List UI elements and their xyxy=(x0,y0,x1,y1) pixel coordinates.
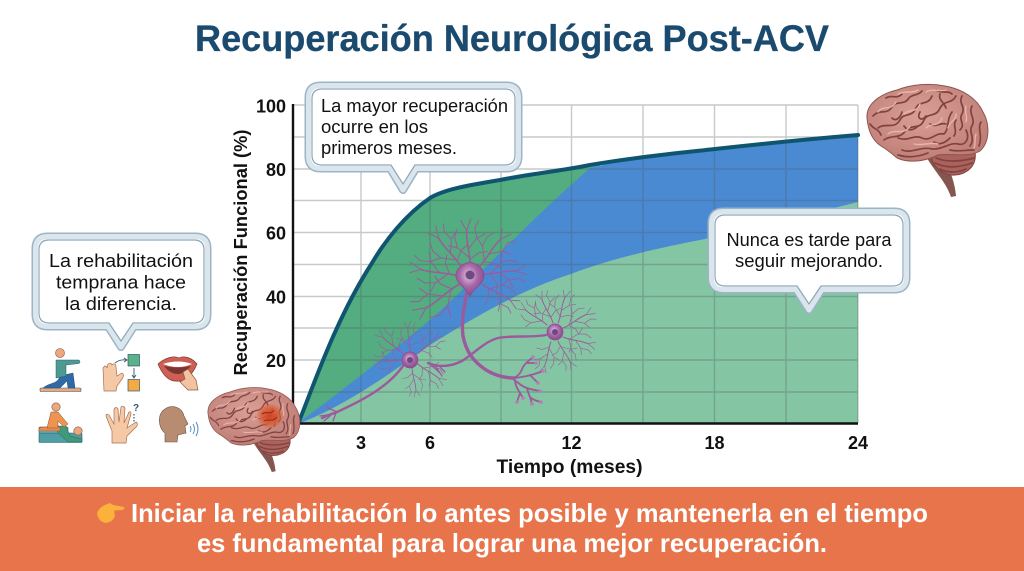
banner: key message xyxy=(0,487,1024,571)
icon: brain with stroke lesion xyxy=(208,388,300,472)
icon: speaking head xyxy=(159,407,198,442)
x axis labels xyxy=(356,433,868,453)
callout: greatest recovery: ocurre en los xyxy=(321,117,428,137)
x axis labels: 24 xyxy=(848,433,868,453)
callout: greatest recovery xyxy=(308,86,518,190)
banner text: es fundamental para lograr una mejor recuperación. xyxy=(197,528,827,558)
icon: kneeling exercise xyxy=(40,348,81,392)
callout: greatest recovery: primeros meses. xyxy=(321,138,457,158)
neuron: left xyxy=(320,321,453,421)
banner text xyxy=(131,498,928,558)
y axis labels: 100 xyxy=(256,96,286,116)
illustration: neurons xyxy=(320,217,600,421)
area: upper green band xyxy=(298,164,600,424)
area: blue band xyxy=(298,135,858,423)
chart: functional recovery over time xyxy=(230,96,868,478)
y axis labels: 20 xyxy=(266,351,286,371)
callout: never too late xyxy=(712,212,906,310)
y axis labels: 40 xyxy=(266,288,286,308)
callout: early rehabilitation: temprana hace xyxy=(56,272,186,292)
neuron: right xyxy=(428,287,600,376)
callout: early rehabilitation: La rehabilitación xyxy=(49,251,193,271)
recovery curve line xyxy=(298,135,858,424)
icon: hand with task flow xyxy=(103,354,140,391)
x axis labels: 18 xyxy=(704,433,725,453)
axes xyxy=(292,104,858,424)
callout: never too late: Nunca es tarde para xyxy=(726,230,892,250)
icon: healthy brain xyxy=(867,84,988,197)
x axis labels: 12 xyxy=(561,433,582,453)
icon: open hand with question mark: ? xyxy=(133,403,139,414)
x axis labels: 3 xyxy=(356,433,366,453)
callout: early rehabilitation xyxy=(36,236,208,347)
title: Recuperación Neurológica Post-ACV xyxy=(195,18,829,59)
y axis labels: 60 xyxy=(266,224,286,244)
grid lines xyxy=(293,105,858,423)
x axis labels: 6 xyxy=(425,433,435,453)
x axis title: Tiempo (meses) xyxy=(496,457,642,478)
y axis title: Recuperación Funcional (%) xyxy=(230,130,251,376)
icon: massage therapy xyxy=(39,403,82,442)
icon: lips and finger xyxy=(158,357,198,390)
callout: early rehabilitation: la diferencia. xyxy=(65,294,177,314)
y axis labels: 80 xyxy=(266,160,286,180)
callout: greatest recovery: La mayor recuperación xyxy=(321,96,508,116)
callout: never too late: seguir mejorando. xyxy=(735,251,883,271)
icon: open hand with question mark xyxy=(106,403,139,443)
neuron: large center xyxy=(404,217,545,406)
y axis labels xyxy=(256,96,286,371)
icon: pointing hand xyxy=(97,503,124,523)
area: lower green band xyxy=(300,202,858,423)
banner text: Iniciar la rehabilitación lo antes posible y mantenerla en el tiempo xyxy=(131,498,928,528)
